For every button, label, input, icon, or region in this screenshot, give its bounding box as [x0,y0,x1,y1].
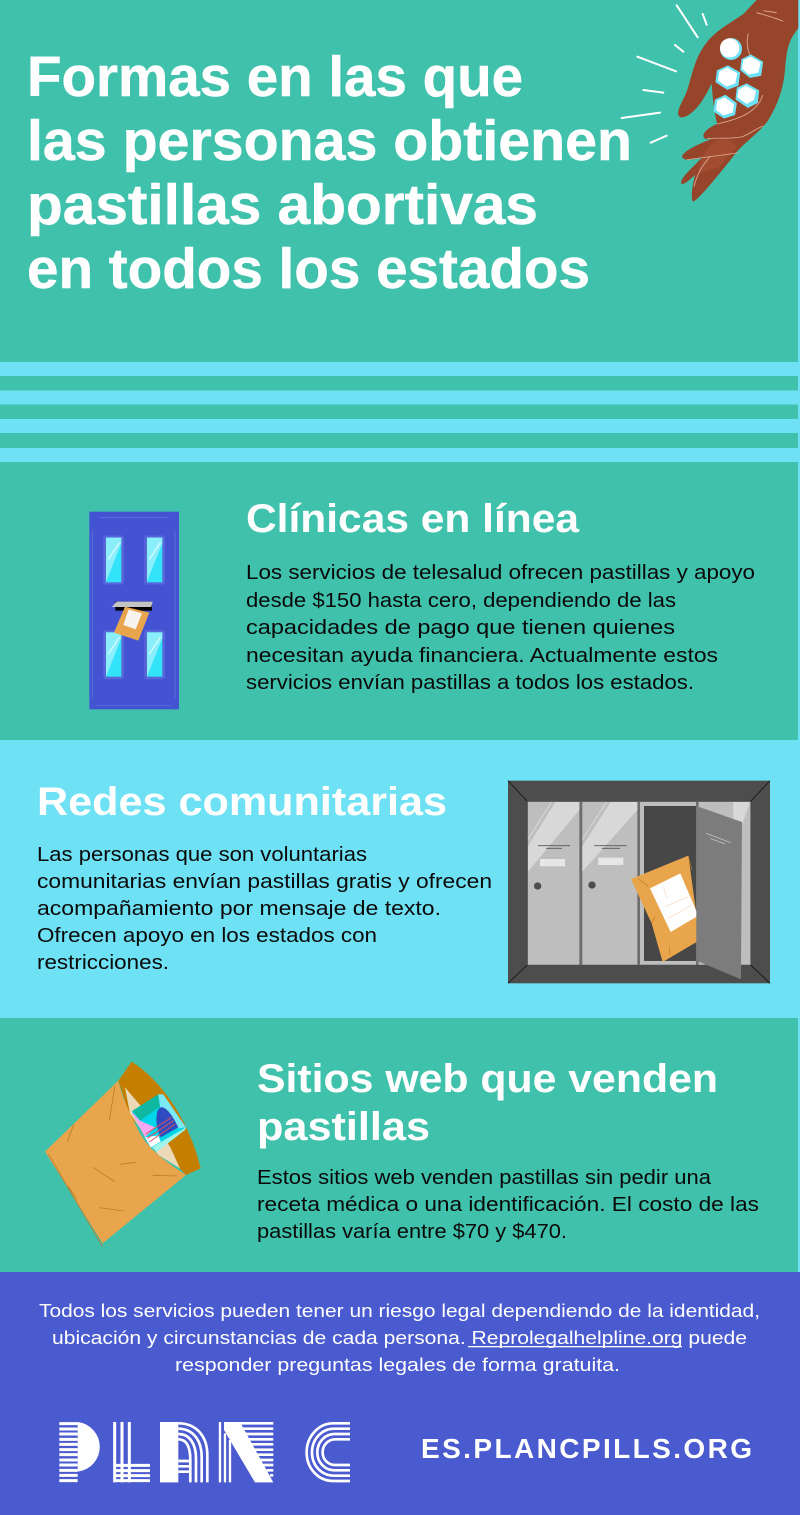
icon: envelope with pills [45,1062,201,1247]
title: las personas obtienen [27,109,632,173]
text block: pastillas varía entre $70 y $470. [257,1220,567,1243]
text block: Los servicios de telesalud ofrecen pastillas y apoyo [246,561,755,584]
text block: Las personas que son voluntarias [37,843,367,866]
website URL: ES.PLANCPILLS.ORG [421,1433,752,1464]
logo letter C [307,1423,350,1481]
text block: Estos sitios web venden pastillas sin pedir una [257,1166,712,1189]
text block: servicios envían pastillas a todos los estados. [246,671,694,694]
title: Formas en las que [27,45,523,109]
title [27,45,632,301]
heading: pastillas [257,1105,430,1149]
text block: comunitarias envían pastillas gratis y ofrecen [37,870,492,893]
decorative stripes [0,362,800,462]
logo letter N [220,1422,273,1482]
text block: acompañamiento por mensaje de texto. [37,897,441,920]
legal note: Todos los servicios pueden tener un riesgo legal dependiendo de la identidad, [39,1300,760,1321]
text block: receta médica o una identificación. El costo de las [257,1193,759,1216]
heading: Clínicas en línea [246,497,580,541]
logo letter L [113,1422,150,1482]
text block: restricciones. [37,951,169,974]
text block: Ofrecen apoyo en los estados con [37,924,377,947]
icon: door with package [89,512,179,709]
logo: Plan C [59,1422,350,1482]
legal note: responder preguntas legales de forma gratuita. [175,1354,620,1375]
legal note: ubicación y circunstancias de cada persona. Reprolegalhelpline.org puede [52,1327,747,1348]
panel: header [0,0,800,740]
title: pastillas abortivas [27,173,538,237]
panel: footer [0,1272,800,1515]
panel: online clinics [89,497,755,709]
text block [246,561,755,694]
icon: package [631,856,700,962]
logo letter P [59,1422,100,1481]
heading: Sitios web que venden [257,1057,718,1101]
text block [37,843,492,974]
logo letter A [160,1422,207,1482]
panel: websites [0,1018,798,1272]
heading [257,1057,718,1149]
panel: community networks [0,740,800,1018]
text block: capacidades de pago que tienen quienes [246,616,675,639]
heading: Redes comunitarias [37,780,447,824]
text block: necesitan ayuda financiera. Actualmente estos [246,644,718,667]
text block: desde $150 hasta cero, dependiendo de las [246,589,676,612]
legal note [39,1300,760,1375]
icon: open door [696,806,742,979]
text block [257,1166,759,1243]
icon: mailboxes with package [508,781,770,983]
icon: hand holding pills [622,0,798,202]
title: en todos los estados [27,237,590,301]
icon: package in door slot [114,607,149,641]
